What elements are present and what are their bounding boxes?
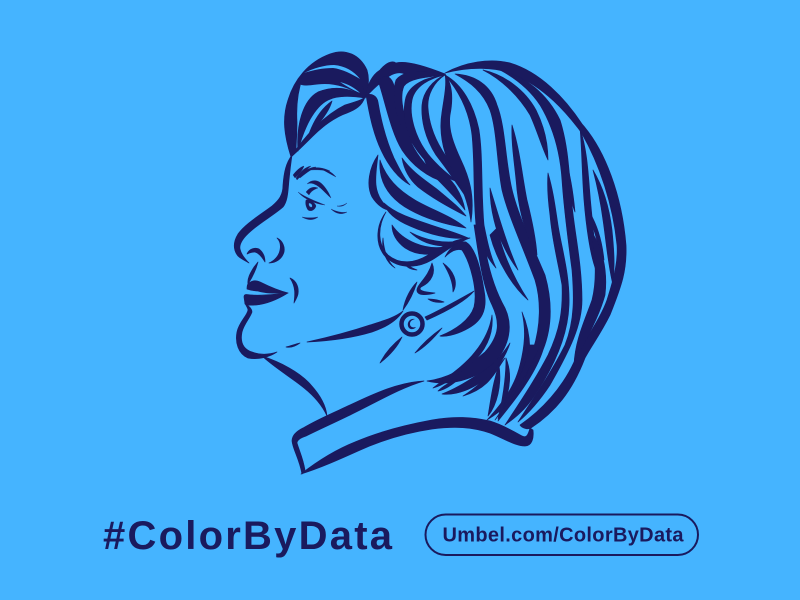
nose wing xyxy=(269,238,284,263)
chin xyxy=(236,303,277,359)
jaw and neck line xyxy=(262,356,327,416)
front hair quiff xyxy=(284,52,368,157)
collar xyxy=(292,381,533,474)
url pill button: Umbel.com/ColorByData xyxy=(442,524,684,546)
side hair swirl xyxy=(369,152,470,270)
lower layered hair tips xyxy=(427,225,540,420)
upper lip line xyxy=(248,262,258,284)
lips xyxy=(244,281,288,305)
top crown hair tuft xyxy=(365,62,468,200)
forehead and nose profile xyxy=(234,155,292,263)
jawline xyxy=(307,311,403,342)
eyebrow xyxy=(293,166,336,180)
url pill button xyxy=(426,514,698,555)
hashtag title: #ColorByData xyxy=(103,514,393,558)
ear xyxy=(380,242,485,363)
earring xyxy=(402,314,422,334)
sweeping long hair strands xyxy=(441,70,614,425)
nostril xyxy=(247,248,265,262)
portrait illustration xyxy=(234,52,626,474)
outer hair silhouette xyxy=(445,61,626,429)
jawline dash xyxy=(286,343,300,347)
smile line xyxy=(290,278,298,303)
eye xyxy=(298,181,347,220)
